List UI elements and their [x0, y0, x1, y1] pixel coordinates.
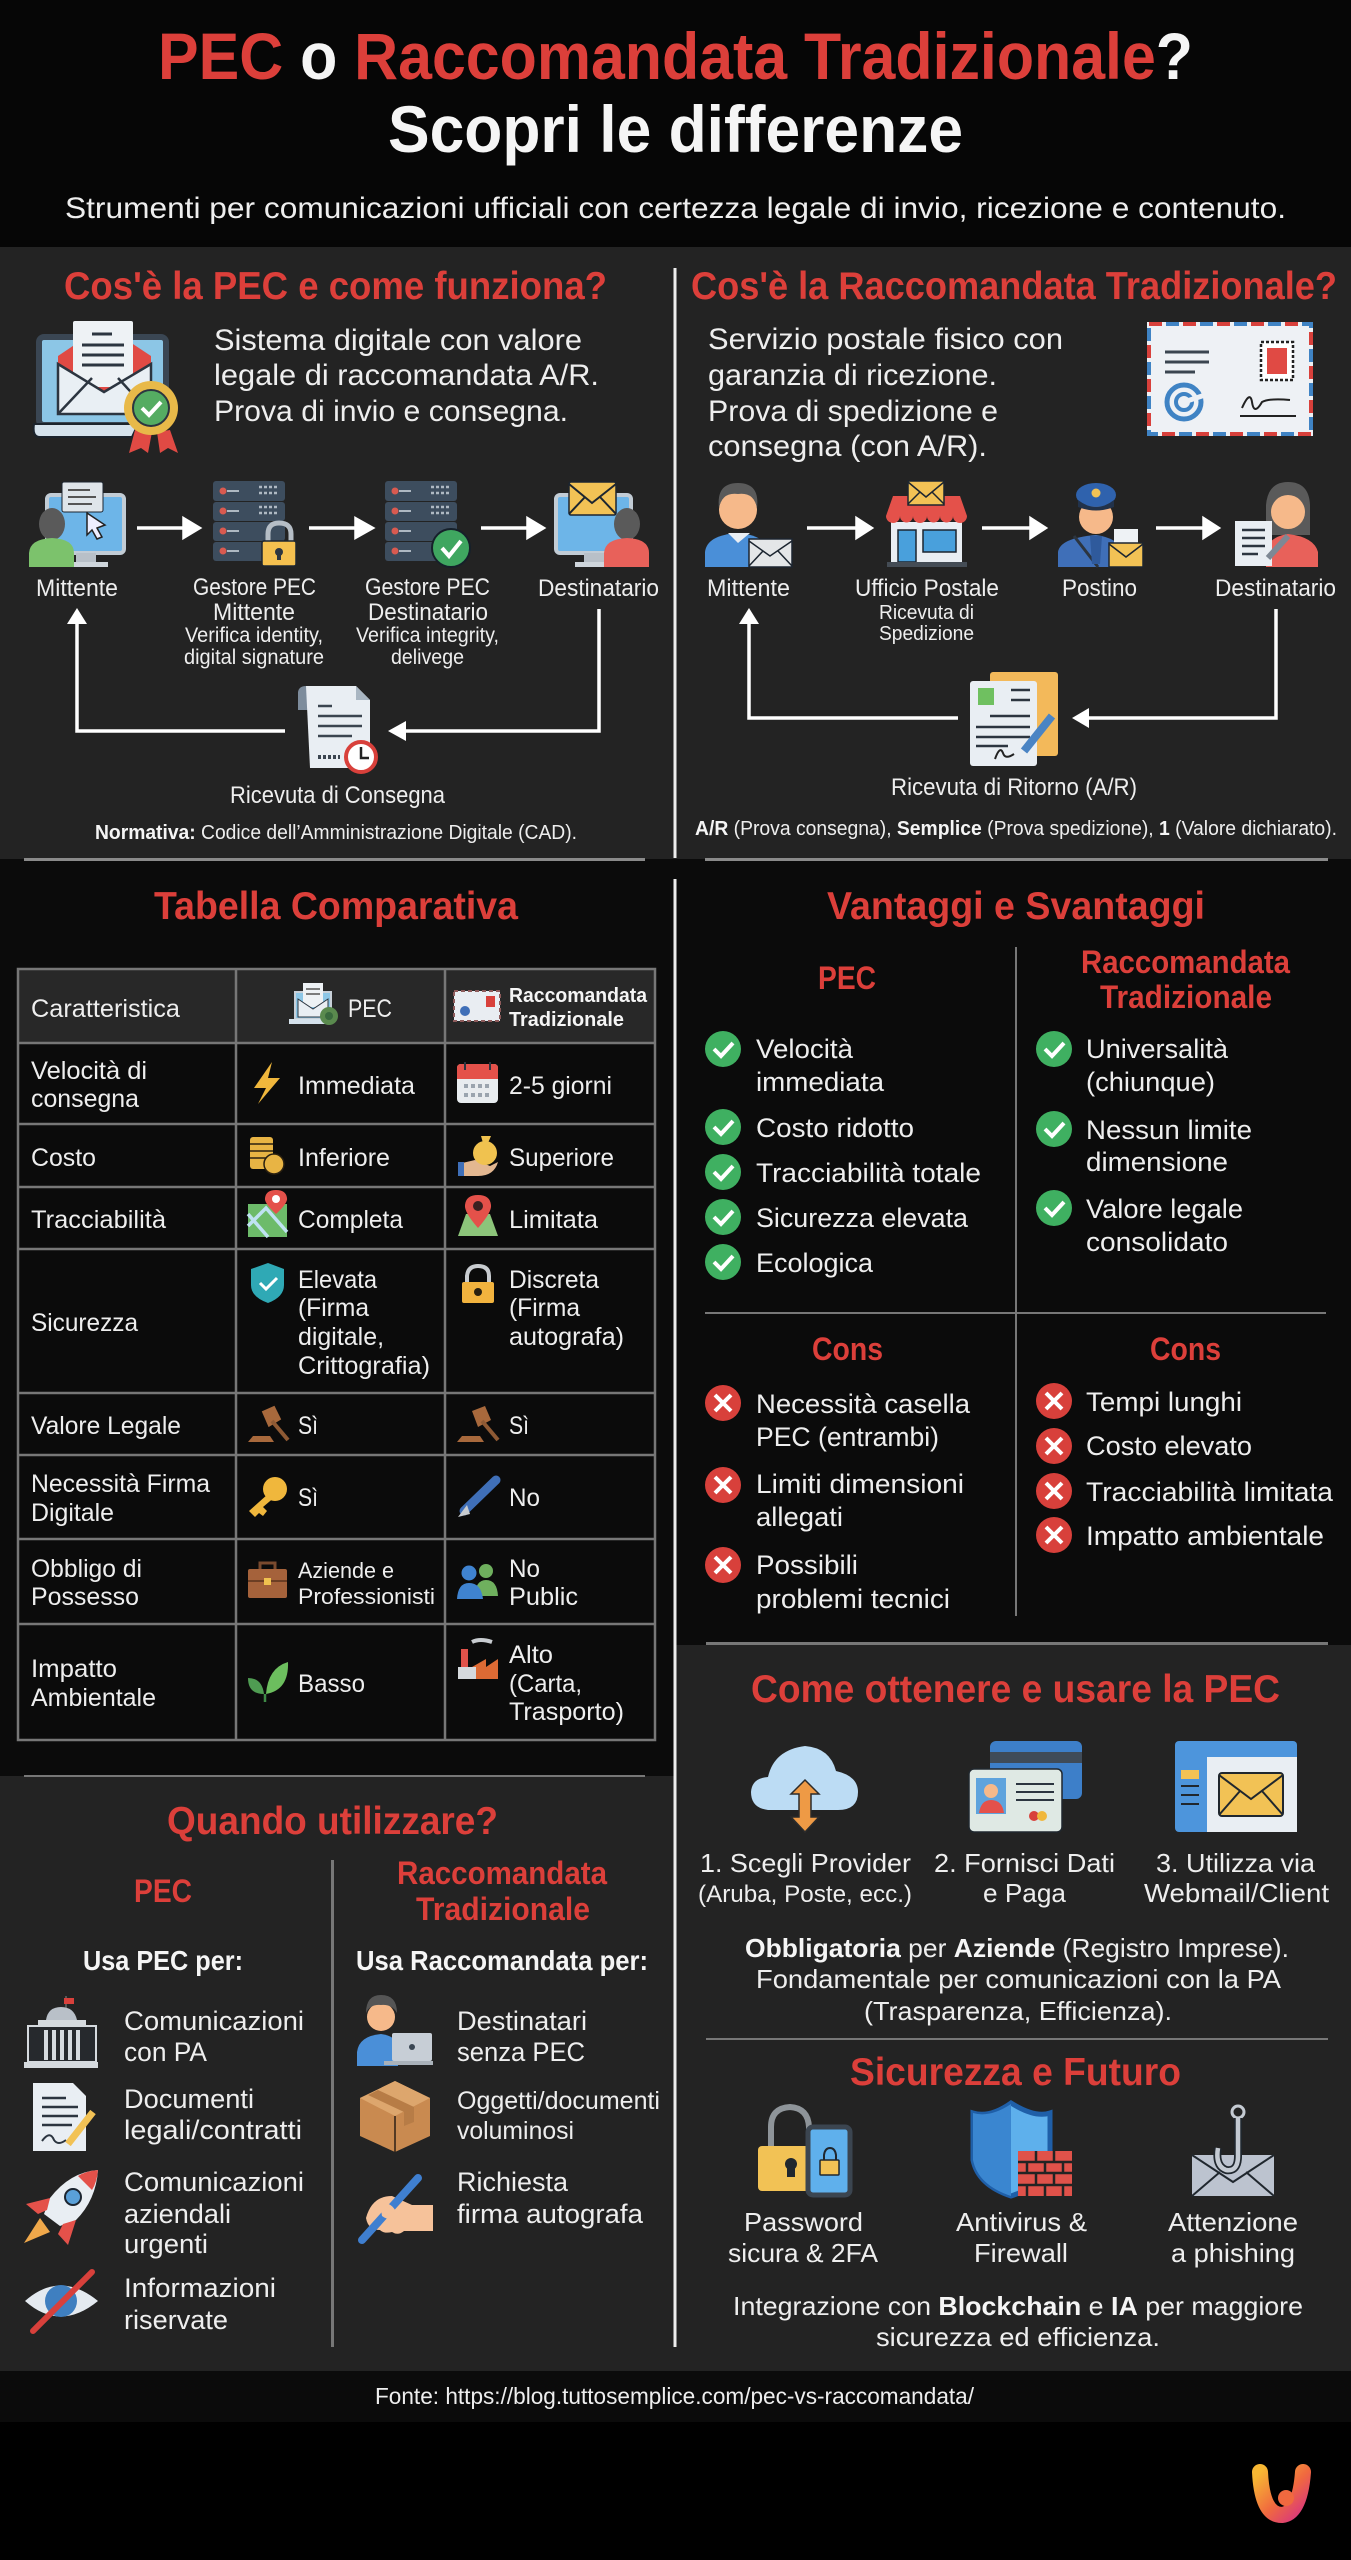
text: PEC description: Sistema digitale con valore: [214, 324, 582, 357]
source: Fonte: https://blog.tuttosemplice.com/pec-vs-raccomandata/: [375, 2383, 975, 2409]
row: sicurezza: Discreta: [509, 1266, 599, 1294]
icon: recipient woman signing: [1235, 482, 1318, 567]
list: Raccomandata cons: Tempi lunghi: [1086, 1387, 1242, 1417]
icon: leaves: [248, 1662, 288, 1702]
icon: delivery receipt: [298, 686, 376, 772]
row: obbligo: No: [509, 1555, 540, 1583]
text: Informazioni riservate: [124, 2273, 276, 2335]
text: obbligatoria: (Trasparenza, Efficienza).: [864, 1996, 1172, 2026]
text: Richiesta firma autografa: [457, 2167, 644, 2229]
text: step 1: [698, 1848, 912, 1908]
text: Comunicazioni aziendali urgenti: Comunicazioni: [124, 2167, 304, 2197]
label: Ufficio Postale: Ufficio Postale: [855, 575, 999, 602]
icon: server with check: [385, 481, 470, 567]
icon: coins: [250, 1137, 284, 1174]
icon: key: [249, 1477, 287, 1517]
icon: padlock: [462, 1266, 494, 1303]
title: [158, 19, 1193, 166]
list: Raccomandata pros: consolidato: [1086, 1227, 1228, 1257]
list: Raccomandata cons: Costo elevato: [1086, 1431, 1252, 1461]
icon: phishing hook and envelope: [1192, 2106, 1274, 2196]
label: Destinatario: Destinatario: [538, 575, 659, 602]
title: Scopri le differenze: [388, 92, 963, 166]
label: Gestore PEC Destinatario: [356, 574, 499, 669]
label: Gestore PEC Mittente: digital signature: [184, 646, 324, 669]
arrow: postman to recipient: [1156, 519, 1218, 537]
icon: return receipt: [970, 672, 1058, 766]
row: impatto: (Carta,: [509, 1670, 582, 1698]
icon: PEC small: [289, 983, 338, 1025]
list: PEC pros: Costo ridotto: [756, 1113, 914, 1143]
list: Raccomandata pros: Valore legale: [1086, 1194, 1243, 1224]
panel: Cos'è la Raccomandata: [675, 247, 1351, 859]
text: Usa PEC per: Usa PEC per:: [83, 1945, 243, 1976]
row: firma digitale: Necessità Firma: [31, 1470, 210, 1498]
text: step 2: e Paga: [983, 1878, 1067, 1908]
icon: laptop with certified envelope: [34, 321, 178, 453]
label: Ricevuta di Consegna: Ricevuta di Consegna: [230, 782, 446, 809]
list: PEC pros: Ecologica: [756, 1248, 874, 1278]
text: Attenzione: [1168, 2207, 1298, 2268]
text: step 1: (Aruba, Poste, ecc.): [698, 1881, 912, 1908]
subheading: Raccomandata: [397, 1855, 607, 1927]
panel: Quando utilizzare: [0, 1775, 675, 2371]
label: Ufficio Postale: Ricevuta di: [879, 602, 974, 624]
text: Normativa: Normativa: Codice dell’Amministrazione Digitale (CAD).: [95, 822, 577, 844]
row: valore legale: [31, 1405, 529, 1442]
row: obbligo: Possesso: [31, 1583, 139, 1611]
header: [0, 0, 1351, 247]
list: PEC pros: Velocità: [756, 1034, 854, 1064]
icon: factory: [458, 1640, 498, 1679]
row: impatto: Ambientale: [31, 1684, 156, 1712]
list: PEC cons: [705, 1385, 971, 1614]
heading: Cos'è la PEC: Cos'è la PEC e come funziona?: [64, 265, 607, 308]
text: Destinatari senza PEC: Destinatari: [457, 2006, 587, 2036]
arrow: post office to postman: [982, 519, 1045, 537]
text: step 2: [934, 1848, 1115, 1908]
text: integrazione: sicurezza ed efficienza.: [876, 2322, 1160, 2352]
row: firma digitale: [31, 1470, 540, 1527]
list: PEC pros: immediata: [756, 1067, 885, 1097]
label: Gestore PEC Destinatario: Verifica integrity,: [356, 624, 499, 647]
row: velocità: consegna: [31, 1085, 139, 1113]
text: Attenzione: a phishing: [1171, 2238, 1295, 2268]
icon: shield and firewall: [973, 2103, 1072, 2196]
subheading: Raccomandata pros: [1081, 944, 1290, 1015]
row: sicurezza: Elevata: [298, 1266, 377, 1294]
panel: Tabella Comparativa: [0, 858, 675, 1776]
panel: Vantaggi e Svantaggi: [675, 858, 1351, 1645]
label: Mittente: Mittente: [36, 575, 118, 602]
row: costo: Superiore: [509, 1144, 614, 1172]
icon: briefcase: [248, 1563, 287, 1598]
icon: gavel: [248, 1405, 288, 1442]
text: Comunicazioni con PA: con PA: [124, 2037, 207, 2067]
list: Raccomandata pros: Nessun limite: [1086, 1115, 1252, 1145]
subheading: Raccomandata cons: Cons: [1150, 1331, 1221, 1367]
heading: Quando utilizzare: Quando utilizzare?: [167, 1800, 498, 1843]
text: Informazioni riservate: riservate: [124, 2305, 228, 2335]
arrow: sender to post office: [807, 519, 871, 537]
row: sicurezza: digitale,: [298, 1323, 384, 1351]
icon: server with lock: [213, 481, 296, 566]
text: Documenti legali: Documenti: [124, 2084, 254, 2114]
text: Password: sicura & 2FA: [728, 2238, 879, 2268]
row: costo: Inferiore: [298, 1144, 390, 1172]
icon: airmail small: [454, 991, 500, 1021]
label: Gestore PEC Mittente: [184, 574, 324, 669]
comparison table: [18, 969, 655, 1740]
subheading: PEC: PEC: [134, 1873, 192, 1909]
row: valore legale: Sì: [298, 1412, 318, 1440]
arrow: return receipt to sender: [739, 608, 958, 718]
text: Richiesta firma autografa: firma autografa: [457, 2199, 644, 2229]
arrow: provider to recipient: [481, 519, 543, 537]
row: tracciabilità: [31, 1190, 598, 1237]
list: PEC pros: Tracciabilità totale: [756, 1158, 981, 1188]
label: Ufficio Postale: Spedizione: [879, 623, 974, 645]
icon: gavel: [457, 1406, 498, 1442]
icon: airmail envelope: [1147, 322, 1313, 436]
text: step 3: 3. Utilizza via: [1156, 1848, 1316, 1878]
icon: map: [248, 1190, 287, 1237]
list: PEC cons: Possibili: [756, 1550, 858, 1580]
panel: Cos'è la PEC: [0, 247, 675, 859]
row: valore legale: Valore Legale: [31, 1412, 181, 1440]
row: sicurezza: [31, 1263, 624, 1380]
row: impatto: Alto: [509, 1641, 553, 1669]
icon: webmail window: [1175, 1741, 1297, 1832]
row: firma digitale: No: [509, 1484, 540, 1512]
icon: government building: [24, 1996, 98, 2068]
icon: sender at computer: [29, 482, 124, 567]
row: obbligo: [31, 1555, 578, 1611]
text: Documenti legali: legali/contratti: [124, 2115, 302, 2145]
text: Comunicazioni aziendali urgenti: [124, 2167, 304, 2259]
list: Raccomandata cons: Impatto ambientale: [1086, 1521, 1324, 1551]
text: obbligatoria: [745, 1933, 1289, 2026]
row: obbligo: Public: [509, 1583, 578, 1611]
list: PEC pros: [705, 1031, 981, 1280]
list: PEC pros: Sicurezza elevata: [756, 1203, 969, 1233]
row: impatto: Basso: [298, 1670, 365, 1698]
row: costo: [31, 1136, 614, 1176]
row: costo: Costo: [31, 1144, 96, 1172]
text: step 2: 2. Fornisci Dati: [934, 1848, 1115, 1878]
row: velocità: Immediata: [298, 1072, 415, 1100]
row: sicurezza: autografa): [509, 1323, 624, 1351]
list: PEC cons: Limiti dimensioni: [756, 1469, 964, 1499]
icon: id and credit card: [969, 1741, 1082, 1832]
list: Raccomandata pros: [1036, 1031, 1252, 1257]
text: Oggetti/documenti voluminosi: Oggetti/documenti: [457, 2087, 660, 2115]
text: PEC description: Prova di invio e consegna.: [214, 395, 568, 428]
text: Antivirus: [956, 2207, 1087, 2268]
text: Oggetti/documenti voluminosi: voluminosi: [457, 2117, 574, 2145]
row: velocità: [31, 1057, 612, 1113]
icon: person with laptop: [357, 1995, 433, 2066]
text: Raccomandata description: garanzia di ricezione.: [708, 359, 997, 392]
icon: post office: [886, 481, 967, 567]
title: PEC o Raccomandata Tradizionale?: [158, 19, 1193, 93]
logo: [1260, 2472, 1303, 2515]
text: Informazioni riservate: Informazioni: [124, 2273, 276, 2303]
text: Usa Raccomandata per: Usa Raccomandata per:: [356, 1945, 648, 1976]
icon: map pin: [458, 1195, 498, 1236]
label: Gestore PEC Mittente: Mittente: [213, 599, 295, 626]
label: Ufficio Postale: [855, 575, 999, 645]
subtitle: Strumenti per comunicazioni ufficiali con certezza legale di invio, ricezione e contenuto.: [65, 192, 1286, 225]
list: PEC cons: Necessità casella: [756, 1389, 971, 1419]
row: velocità: Velocità di: [31, 1057, 147, 1085]
text: step 3: [1144, 1848, 1330, 1908]
arrow: sender to provider: [137, 519, 199, 537]
text: step 3: Webmail/Client: [1144, 1878, 1330, 1908]
heading: Come ottenere: Come ottenere e usare la PEC: [751, 1668, 1280, 1711]
row: sicurezza: Sicurezza: [31, 1309, 138, 1337]
subheading: PEC pros: PEC: [818, 960, 876, 996]
row: valore legale: Sì: [509, 1412, 529, 1440]
label: Ricevuta di Ritorno: Ricevuta di Ritorno (A/R): [891, 774, 1137, 801]
list: PEC cons: PEC (entrambi): [756, 1422, 939, 1452]
row: sicurezza: (Firma: [298, 1294, 369, 1322]
text: Comunicazioni con PA: Comunicazioni: [124, 2006, 304, 2036]
text: tipologie raccomandata: A/R (Prova consegna), Semplice (Prova spedizione), 1 (Valore dichiarato).: [695, 818, 1337, 840]
text: Raccomandata description: [708, 323, 1063, 463]
icon: people: [457, 1564, 498, 1599]
list: Raccomandata cons: [1036, 1383, 1334, 1553]
label: Gestore PEC Destinatario: Destinatario: [368, 599, 488, 626]
list: Raccomandata pros: dimensione: [1086, 1147, 1228, 1177]
icon: calendar: [457, 1062, 498, 1103]
icon: lightning bolt: [254, 1062, 280, 1104]
text: Richiesta firma autografa: Richiesta: [457, 2167, 569, 2197]
row: tracciabilità: Completa: [298, 1206, 403, 1234]
subheading: PEC cons: Cons: [812, 1331, 883, 1367]
text: Documenti legali: [124, 2084, 302, 2145]
arrow: recipient to return receipt: [1072, 609, 1276, 728]
icon: sender man with envelope: [705, 483, 792, 567]
label: Destinatario: Destinatario: [1215, 575, 1336, 602]
label: Gestore PEC Mittente: Verifica identity,: [185, 624, 323, 647]
text: Destinatari senza PEC: senza PEC: [457, 2037, 585, 2067]
row: impatto: Trasporto): [509, 1698, 624, 1726]
row: obbligo: Professionisti: [298, 1584, 435, 1609]
label: Gestore PEC Destinatario: delivege: [391, 646, 464, 669]
row: header: Caratteristica: [31, 995, 180, 1023]
icon: parcel: [360, 2081, 430, 2152]
row: header: PEC: [348, 995, 392, 1023]
row: sicurezza: (Firma: [509, 1294, 580, 1322]
row: firma digitale: Sì: [298, 1484, 318, 1512]
icon: lock and phone: [758, 2107, 850, 2195]
arrow: recipient to receipt: [388, 609, 599, 741]
list: PEC cons: allegati: [756, 1502, 843, 1532]
text: Destinatari senza PEC: [457, 2006, 587, 2067]
row: obbligo: Obbligo di: [31, 1555, 142, 1583]
label: Gestore PEC Mittente: Gestore PEC: [193, 574, 316, 601]
row: impatto: Impatto: [31, 1655, 117, 1683]
text: Comunicazioni aziendali urgenti: urgenti: [124, 2229, 208, 2259]
text: Password: [728, 2207, 879, 2268]
text: Raccomandata description: Prova di spedizione e: [708, 395, 998, 428]
icon: document with pencil: [33, 2083, 93, 2151]
subheading: Raccomandata: Raccomandata: [397, 1855, 607, 1891]
text: step 1: 1. Scegli Provider: [700, 1848, 911, 1878]
text: Raccomandata description: consegna (con A/R).: [708, 430, 987, 463]
row: sicurezza: Crittografia): [298, 1352, 430, 1380]
row: tracciabilità: Limitata: [509, 1206, 598, 1234]
text: integrazione: [733, 2291, 1303, 2352]
row: obbligo: Aziende e: [298, 1558, 394, 1583]
text: Antivirus: Firewall: [974, 2238, 1068, 2268]
list: Raccomandata cons: Tracciabilità limitata: [1086, 1477, 1334, 1507]
list: Raccomandata pros: Universalità: [1086, 1034, 1229, 1064]
footer: [0, 2371, 1351, 2515]
list: PEC cons: problemi tecnici: [756, 1584, 950, 1614]
icon: postman: [1058, 483, 1143, 567]
text: Comunicazioni con PA: [124, 2006, 304, 2067]
icon: rocket: [24, 2170, 98, 2245]
heading: Vantaggi e Svantaggi: Vantaggi e Svantaggi: [827, 885, 1205, 928]
heading: Tabella Comparativa: Tabella Comparativa: [154, 885, 518, 928]
row: header: Tradizionale: [509, 1009, 624, 1031]
text: Comunicazioni aziendali urgenti: aziendali: [124, 2199, 231, 2229]
text: obbligatoria: Obbligatoria per Aziende (Registro Imprese).: [745, 1933, 1289, 1963]
icon: pen: [458, 1480, 496, 1517]
text: PEC description: [214, 324, 599, 428]
icon: hand with money bag: [458, 1136, 498, 1176]
row: header: [31, 983, 648, 1031]
row: velocità: 2-5 giorni: [509, 1072, 612, 1100]
text: Antivirus: Antivirus &: [956, 2207, 1087, 2237]
subheading: Raccomandata pros: Raccomandata: [1081, 944, 1290, 980]
row: impatto: [31, 1640, 624, 1726]
row: tracciabilità: Tracciabilità: [31, 1206, 166, 1234]
icon: shield: [251, 1263, 284, 1303]
text: obbligatoria: Fondamentale per comunicazioni con la PA: [756, 1964, 1282, 1994]
row: firma digitale: Digitale: [31, 1499, 114, 1527]
label: Postino: Postino: [1062, 575, 1137, 602]
text: Oggetti/documenti voluminosi: [457, 2087, 660, 2145]
text: PEC description: legale di raccomandata A/R.: [214, 359, 599, 392]
subheading: Raccomandata: Tradizionale: [416, 1891, 590, 1927]
label: Mittente: Mittente: [707, 575, 790, 602]
icon: crossed out eye: [25, 2272, 98, 2331]
icon: recipient at computer: [556, 482, 649, 567]
list: Raccomandata pros: (chiunque): [1086, 1067, 1215, 1097]
text: Password: Password: [744, 2207, 863, 2237]
text: Raccomandata description: Servizio postale fisico con: [708, 323, 1063, 356]
label: Gestore PEC Destinatario: Gestore PEC: [365, 574, 490, 601]
row: header: Raccomandata: [509, 985, 648, 1007]
text: Attenzione: Attenzione: [1168, 2207, 1298, 2237]
heading: Sicurezza e Futuro: Sicurezza e Futuro: [850, 2051, 1181, 2094]
icon: hand signing with pen: [362, 2178, 433, 2240]
icon: cloud: [751, 1746, 858, 1832]
arrow: receipt to sender: [67, 608, 285, 731]
subheading: Raccomandata pros: Tradizionale: [1100, 979, 1272, 1015]
text: integrazione: Integrazione con Blockchain e IA per maggiore: [733, 2291, 1303, 2321]
panel: Come ottenere e usare la PEC: [675, 1642, 1351, 2371]
arrow: provider to provider: [309, 519, 372, 537]
